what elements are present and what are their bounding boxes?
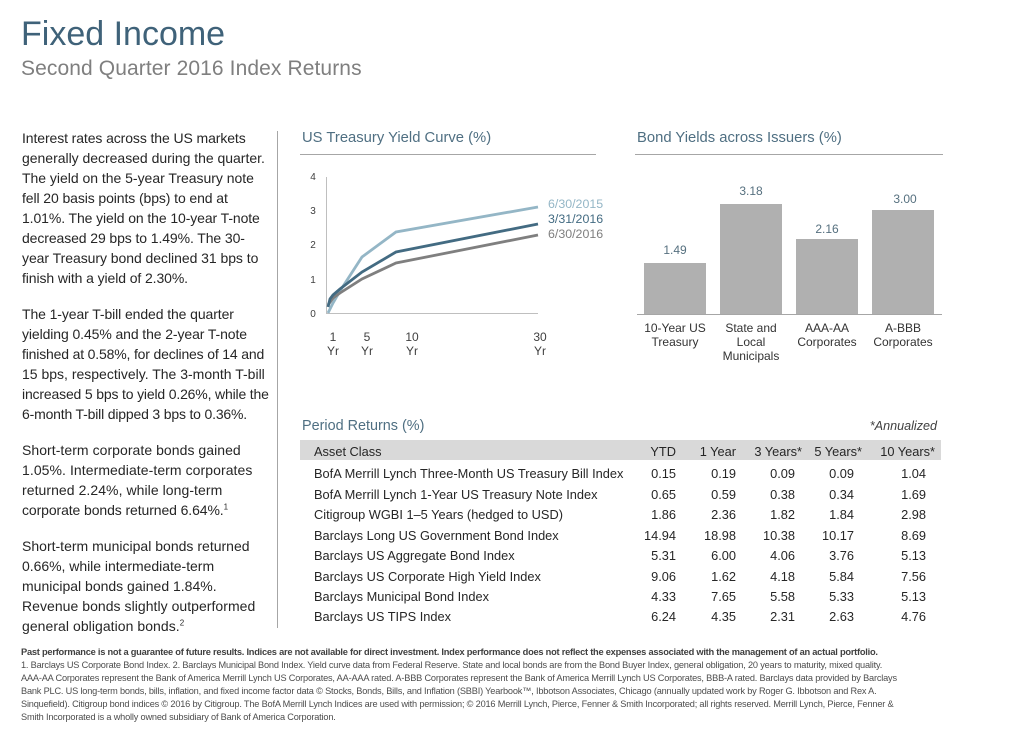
text block: market commentary: Short-term corporate bonds gained [22,442,241,458]
text block: market commentary: 0.66%, while intermediate-term [22,558,214,574]
text block: market commentary: fell 20 basis points (bps) to end at [22,190,228,206]
table row: 10.38 [763,528,795,543]
line chart: 0 [310,309,316,320]
bar chart: Municipals [723,349,779,363]
text block: market commentary: The 1-year T-bill ended the quarter [22,306,234,322]
table row [314,528,926,543]
bar chart: 3.00 [893,192,917,206]
line chart: 1 [310,275,316,286]
text block: market commentary: corporate bonds returned 6.64%.1 [22,502,228,518]
footnotes: Bank PLC. US long-term bonds, bills, inflation, and fixed income factor data © Stocks, Bonds, Bills, and Inflation (SBBI) Yearbook™, Ibbotson Associates, Chicago (annually updated work by Roger G. Ibbotson and Rex A. [21,686,876,696]
line chart: Yr [534,344,546,358]
table row [314,589,926,604]
table row: BofA Merrill Lynch Three-Month US Treasury Bill Index [314,466,623,481]
table row: 0.59 [711,487,736,502]
text block: market commentary: increased 5 bps to yield 0.26%, while the [22,386,269,402]
table header: 1 Year [700,444,736,459]
text block: market commentary: The yield on the 5-year Treasury note [22,170,254,186]
table row: 7.56 [901,569,926,584]
table row: 8.69 [901,528,926,543]
footnotes: AAA-AA Corporates represent the Bank of America Merrill Lynch US Corporates, AA-AAA rated. A-BBB Corporates represent the Bank of America Merrill Lynch US Corporates, BBB-A rated. Barclays data provided by Barclays [21,673,897,683]
heading: bond yields: Bond Yields across Issuers (%) [637,130,842,146]
table row: Citigroup WGBI 1–5 Years (hedged to USD) [314,507,563,522]
heading: period returns: Period Returns (%) [302,418,424,434]
table row: Barclays Long US Government Bond Index [314,528,559,543]
table row [314,507,926,522]
table row: 5.84 [829,569,854,584]
bar chart: A-BBB [885,321,921,335]
text block: market commentary: generally decreased during the quarter. [22,150,265,166]
table row: 6.24 [651,609,676,624]
line chart: Yr [406,344,418,358]
text block: market commentary: municipal bonds gained 1.84%. [22,578,217,594]
table header: 3 Years* [754,444,802,459]
footnotes: Sinquefield). Citigroup bond indices © 2016 by Citigroup. The BofA Merrill Lynch Indices are used with permission; © 2016 Merrill Lynch, Pierce, Fenner & Smith Incorporated; all rights reserved. Merrill Lynch, Pierce, Fenner & [21,699,893,709]
table row: 9.06 [651,569,676,584]
bar chart: 2.16 [815,222,839,236]
text block: market commentary: finished at 0.58%, for declines of 14 and [22,346,264,362]
line chart: 3 [310,206,316,217]
bar chart: 10-Year US [644,321,706,335]
table row: 1.62 [711,569,736,584]
table row: 5.33 [829,589,854,604]
table row [314,609,926,624]
bar chart [637,184,942,363]
table row: 4.18 [770,569,795,584]
table row: 2.36 [711,507,736,522]
bar chart: State and [725,321,777,335]
table row: 4.06 [770,548,795,563]
text block: market commentary: returned 2.24%, while long-term [22,482,222,498]
table row: 0.09 [829,466,854,481]
table row: 1.82 [770,507,795,522]
text block: market commentary: general obligation bonds.2 [22,618,184,634]
table row: 14.94 [644,528,676,543]
text block: market commentary: Revenue bonds slightly outperformed [22,598,255,614]
table header: 5 Years* [814,444,862,459]
table row: 2.31 [770,609,795,624]
text block: market commentary [22,130,269,634]
text block: market commentary: Interest rates across the US markets [22,130,246,146]
table row: 7.65 [711,589,736,604]
table row [314,487,926,502]
table row: 4.76 [901,609,926,624]
table header [300,440,941,460]
table row: 0.15 [651,466,676,481]
table header: 10 Years* [880,444,935,459]
footnotes: 1. Barclays US Corporate Bond Index. 2. Barclays Municipal Bond Index. Yield curve data from Federal Reserve. State and local bonds are from the Bond Buyer Index, general obligation, 20 years to maturity, mixed quality. [21,660,882,670]
bar chart: Corporates [797,335,857,349]
text block: market commentary: year Treasury bond declined 31 bps to [22,250,258,266]
line chart: 5 [364,330,371,344]
table row: 18.98 [704,528,736,543]
table row: BofA Merrill Lynch 1-Year US Treasury Note Index [314,487,598,502]
table row: 5.58 [770,589,795,604]
table row: 0.38 [770,487,795,502]
heading: yield curve: US Treasury Yield Curve (%) [302,130,491,146]
table row: 2.98 [901,507,926,522]
footnotes: Past performance is not a guarantee of future results. Indices are not available for direct investment. Index performance does not reflect the expenses associated with the management of an actual portfolio. [21,647,878,657]
table row: 2.63 [829,609,854,624]
footnotes: Smith Incorporated is a wholly owned subsidiary of Bank of America Corporation. [21,712,336,722]
note: annualized: *Annualized [870,419,937,433]
table row: 5.31 [651,548,676,563]
bar chart: AAA-AA [805,321,849,335]
table row: 4.33 [651,589,676,604]
line chart [310,172,603,358]
line chart: Yr [361,344,373,358]
table row: Barclays US Aggregate Bond Index [314,548,515,563]
subtitle: Second Quarter 2016 Index Returns [21,57,362,80]
panel: US Treasury yield curve [300,130,603,358]
table row [314,569,926,584]
table row [314,548,926,563]
text block: market commentary: Short-term municipal bonds returned [22,538,250,554]
line chart: 6/30/2015 [548,197,603,211]
table row: 1.86 [651,507,676,522]
text block: market commentary: 6-month T-bill dipped 3 bps to 0.36%. [22,406,247,422]
footnotes [21,647,897,722]
table row: 5.13 [901,589,926,604]
bar chart: 1.49 [663,243,687,257]
table row: Barclays US Corporate High Yield Index [314,569,541,584]
table header: YTD [650,444,676,459]
table row: 0.34 [829,487,854,502]
table row: Barclays Municipal Bond Index [314,589,489,604]
table row: 3.76 [829,548,854,563]
line chart: 10 [405,330,419,344]
table row [314,466,926,481]
bar chart: 3.18 [739,184,763,198]
line chart: 1 [330,330,337,344]
table header: Asset Class [314,444,382,459]
table row: 1.69 [901,487,926,502]
bar chart: Corporates [873,335,933,349]
line chart: 30 [533,330,547,344]
table row: 0.09 [770,466,795,481]
text block: market commentary: 1.05%. Intermediate-term corporates [22,462,252,478]
bar chart: Local [737,335,765,349]
table row: 5.13 [901,548,926,563]
table row: 10.17 [822,528,854,543]
table row: 1.04 [901,466,926,481]
text block: market commentary: decreased 29 bps to 1.49%. The 30- [22,230,245,246]
line chart: Yr [327,344,339,358]
text block: market commentary: 15 bps, respectively. The 3-month T-bill [22,366,265,382]
table row: Barclays US TIPS Index [314,609,451,624]
panel: bond yields across issuers [635,130,943,363]
line chart: 4 [310,172,316,183]
bar chart: Treasury [652,335,698,349]
line chart: 2 [310,240,316,251]
line chart: 3/31/2016 [548,212,603,226]
text block: market commentary: finish with a yield of 2.30%. [22,270,188,286]
text block: market commentary: yielding 0.45% and the 2-year T-note [22,326,247,342]
line chart: 6/30/2016 [548,227,603,241]
table row: 6.00 [711,548,736,563]
panel: period returns table [302,418,938,434]
title: Fixed Income [21,15,225,53]
table row: 0.19 [711,466,736,481]
table row: 0.65 [651,487,676,502]
table row: 4.35 [711,609,736,624]
table row: 1.84 [829,507,854,522]
text block: market commentary: 1.01%. The yield on the 10-year T-note [22,210,260,226]
